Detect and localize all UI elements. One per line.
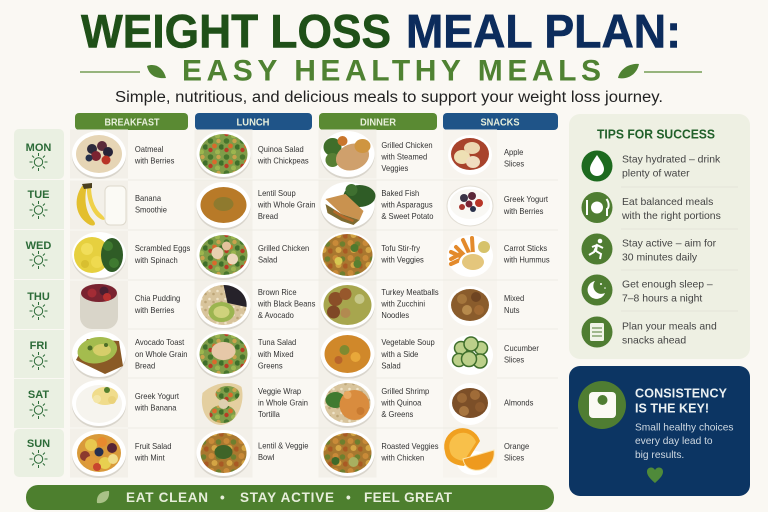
column headers: LUNCH (236, 116, 270, 128)
meal: Fruit Salad with Mint: Fruit Salad (135, 442, 171, 451)
meal: Quinoa Salad with Chickpeas: Quinoa Salad (258, 145, 304, 154)
tips heading: TIPS FOR SUCCESS (597, 128, 715, 142)
meal: Tofu Stir-fry with Veggies: Tofu Stir-fry (381, 244, 420, 253)
meal: Roasted Veggies with Chicken (318, 428, 439, 478)
day column: THU (27, 291, 50, 303)
breakfast column (70, 130, 190, 478)
meal: Grilled Chicken Salad: Salad (258, 255, 277, 265)
banner: FEEL GREAT (364, 490, 453, 505)
column headers: DINNER (360, 116, 396, 128)
tagline: Simple, nutritious, and delicious meals to support your weight loss journey. (115, 89, 663, 106)
meal: Almonds: Almonds (504, 398, 533, 408)
meal: Roasted Veggies with Chicken: with Chicken (380, 453, 424, 463)
meal: Avocado Toast on Whole Grain Bread: Avocado Toast (135, 338, 185, 347)
meal: Carrot Sticks with Hummus (443, 230, 550, 280)
tip: hydrate: Stay hydrated – drink (622, 154, 721, 166)
meal: Scrambled Eggs with Spinach: with Spinach (134, 256, 178, 265)
meal: Baked Fish with Asparagus and Sweet Potato (318, 180, 434, 230)
column headers: SNACKS (480, 116, 520, 128)
meal: Banana Smoothie: Smoothie (135, 205, 167, 215)
meal: Lentil Soup with Whole Grain Bread: with Whole Grain (257, 200, 315, 210)
banner (26, 485, 554, 510)
meal: Apple Slices: Apple (504, 148, 524, 157)
meal: Tuna Salad with Mixed Greens: Greens (258, 361, 283, 371)
meal: Baked Fish with Asparagus and Sweet Potato: & Sweet Potato (381, 212, 434, 221)
meal: Veggie Wrap in Whole Grain Tortilla: Tortilla (258, 410, 280, 419)
snacks column (443, 130, 550, 478)
meal: Fruit Salad with Mint (70, 428, 171, 478)
meal: Brown Rice with Black Beans and Avocado: & Avocado (258, 311, 294, 320)
meal: Turkey Meatballs with Zucchini Noodles (318, 280, 439, 330)
tip: plan ahead (582, 316, 717, 348)
meal: Apple Slices (443, 130, 524, 178)
meal: Apple Slices: Slices (504, 159, 524, 169)
tip: sleep: 7–8 hours a night (622, 294, 702, 304)
meal: Fruit Salad with Mint: with Mint (134, 453, 165, 463)
meal: Greek Yogurt with Banana (70, 378, 180, 428)
meal: Grilled Chicken with Steamed Veggies: with Steamed (380, 152, 427, 162)
meal: Chia Pudding with Berries: with Berries (134, 306, 174, 315)
column headers (75, 113, 558, 130)
icon: scale (578, 381, 626, 429)
meal: Grilled Chicken Salad (194, 230, 309, 280)
banner: EAT CLEAN (126, 490, 208, 505)
meal: Tofu Stir-fry with Veggies (318, 230, 424, 280)
meal: Veggie Wrap in Whole Grain Tortilla: Veggie Wrap (258, 387, 302, 396)
panel: tips for success (569, 114, 750, 359)
meal: Grilled Chicken with Steamed Veggies: Veggies (381, 164, 408, 173)
meal: Grilled Shrimp with Quinoa and Greens (318, 378, 430, 428)
meal: Brown Rice with Black Beans and Avocado (194, 280, 315, 330)
panel: consistency is the key (569, 366, 750, 496)
meal: Vegetable Soup with a Side Salad: Salad (381, 361, 401, 371)
meal: Scrambled Eggs with Spinach: Scrambled Eggs (135, 244, 190, 253)
meal: Turkey Meatballs with Zucchini Noodles: with Zucchini (380, 299, 425, 309)
title (81, 4, 681, 58)
meal: Lentil Soup with Whole Grain Bread (194, 180, 315, 230)
meal: Brown Rice with Black Beans and Avocado: Brown Rice (258, 288, 297, 297)
tip: plan ahead: Plan your meals and (622, 322, 717, 332)
meal: Turkey Meatballs with Zucchini Noodles: Noodles (381, 311, 409, 320)
meal: Greek Yogurt with Berries: with Berries (503, 207, 543, 216)
meal: Tuna Salad with Mixed Greens (194, 330, 296, 379)
dinner column (318, 130, 439, 478)
meal: Veggie Wrap in Whole Grain Tortilla: in Whole Grain (258, 398, 308, 408)
consistency body: Small healthy choices (635, 422, 734, 434)
title: WEIGHT LOSS (81, 4, 391, 58)
tip: sleep: Get enough sleep – (622, 280, 713, 290)
meal: Grilled Shrimp with Quinoa and Greens: Grilled Shrimp (381, 387, 430, 396)
meal: Lentil and Veggie Bowl: Lentil & Veggie (258, 441, 309, 451)
column headers: BREAKFAST (104, 116, 160, 128)
tip: balanced meals (582, 192, 721, 223)
meal: Grilled Chicken with Steamed Veggies: Grilled Chicken (381, 141, 433, 150)
tip: balanced meals: with the right portions (621, 211, 721, 222)
meal: Roasted Veggies with Chicken: Roasted Veggies (381, 442, 439, 451)
consistency heading: CONSISTENCY (635, 386, 728, 400)
meal: Orange Slices (443, 428, 530, 478)
icon: heart (647, 467, 663, 483)
meal: Greek Yogurt with Berries: Greek Yogurt (504, 195, 549, 204)
consistency body: every day lead to (635, 436, 713, 447)
meal: Chia Pudding with Berries: Chia Pudding (135, 294, 180, 303)
meal: Oatmeal with Berries (70, 130, 174, 179)
meal: Scrambled Eggs with Spinach (70, 230, 190, 280)
meal: Baked Fish with Asparagus and Sweet Potato: Baked Fish (381, 189, 419, 198)
meal: Greek Yogurt with Berries (443, 180, 549, 230)
meal: Avocado Toast on Whole Grain Bread: Bread (135, 361, 155, 371)
meal: Veggie Wrap in Whole Grain Tortilla (194, 378, 308, 428)
banner: • (220, 490, 225, 505)
day column: SAT (28, 389, 49, 401)
consistency body: big results. (635, 450, 684, 461)
banner: STAY ACTIVE (240, 490, 334, 505)
meal: Turkey Meatballs with Zucchini Noodles: Turkey Meatballs (381, 288, 439, 297)
meal: Lentil Soup with Whole Grain Bread: Bread (258, 212, 278, 221)
meal: Avocado Toast on Whole Grain Bread (70, 330, 187, 379)
subtitle with leaves: EASY HEALTHY MEALS (182, 54, 601, 88)
meal: Orange Slices: Orange (504, 442, 530, 451)
meal: Oatmeal with Berries: with Berries (134, 156, 174, 166)
meal: Grilled Chicken with Steamed Veggies (318, 130, 433, 179)
tip: plan ahead: snacks ahead (622, 336, 686, 346)
meal: Almonds (443, 378, 533, 428)
meal: Vegetable Soup with a Side Salad: with a Side (380, 350, 419, 359)
meal: Greek Yogurt with Banana: Greek Yogurt (135, 392, 180, 401)
meal: Grilled Shrimp with Quinoa and Greens: & Greens (381, 410, 413, 419)
tip: stay active: Stay active – aim for (622, 238, 717, 250)
day column: SUN (27, 438, 50, 450)
day column: TUE (28, 189, 50, 201)
meal: Tuna Salad with Mixed Greens: with Mixed (257, 350, 294, 359)
lunch column (194, 130, 315, 478)
meal: Grilled Chicken Salad: Grilled Chicken (258, 244, 309, 253)
meal: Avocado Toast on Whole Grain Bread: on Whole Grain (135, 350, 187, 359)
tip: hydrate: plenty of water (622, 168, 690, 180)
meal: Banana Smoothie: Banana (135, 194, 162, 203)
tip: hydrate (582, 150, 721, 182)
subtitle with leaves (80, 54, 702, 88)
title: MEAL PLAN: (406, 4, 681, 58)
icon: banner leaf (97, 491, 109, 503)
meal: Quinoa Salad with Chickpeas (194, 130, 309, 179)
day column (14, 129, 64, 477)
meal: Oatmeal with Berries: Oatmeal (135, 145, 164, 154)
day column: MON (26, 142, 51, 154)
meal: Lentil and Veggie Bowl (194, 428, 309, 478)
day column: FRI (30, 340, 47, 352)
meal: Cucumber Slices: Slices (504, 355, 524, 365)
meal: Carrot Sticks with Hummus: with Hummus (503, 255, 550, 265)
meal: Chia Pudding with Berries (70, 280, 180, 330)
meal: Tofu Stir-fry with Veggies: with Veggies (380, 255, 424, 265)
meal: Greek Yogurt with Banana: with Banana (134, 403, 177, 413)
meal: Grilled Shrimp with Quinoa and Greens: with Quinoa (380, 398, 422, 408)
meal: Mixed Nuts (443, 280, 524, 330)
tip: sleep (582, 274, 713, 306)
meal: Lentil Soup with Whole Grain Bread: Lentil Soup (258, 189, 296, 198)
meal: Carrot Sticks with Hummus: Carrot Sticks (504, 244, 547, 253)
meal: Banana Smoothie (70, 180, 167, 230)
meal: Cucumber Slices: Cucumber (504, 344, 539, 353)
meal: Orange Slices: Slices (504, 453, 524, 463)
day column: WED (26, 240, 51, 252)
meal: Baked Fish with Asparagus and Sweet Potato: with Asparagus (380, 200, 433, 210)
consistency heading: IS THE KEY! (635, 402, 709, 416)
meal: Vegetable Soup with a Side Salad (318, 330, 435, 379)
meal: Mixed Nuts: Nuts (504, 306, 520, 315)
meal: Cucumber Slices (443, 330, 539, 378)
meal: Lentil and Veggie Bowl: Bowl (258, 453, 275, 462)
meal: Vegetable Soup with a Side Salad: Vegetable Soup (381, 338, 435, 347)
meal: Brown Rice with Black Beans and Avocado: with Black Beans (257, 299, 315, 309)
tip: stay active (582, 234, 717, 264)
meal: Tuna Salad with Mixed Greens: Tuna Salad (258, 338, 296, 347)
meal: Quinoa Salad with Chickpeas: with Chickpeas (257, 156, 309, 166)
meal: Mixed Nuts: Mixed (504, 294, 524, 303)
tip: stay active: 30 minutes daily (622, 252, 698, 264)
tip: balanced meals: Eat balanced meals (622, 197, 713, 208)
banner: • (346, 490, 351, 505)
